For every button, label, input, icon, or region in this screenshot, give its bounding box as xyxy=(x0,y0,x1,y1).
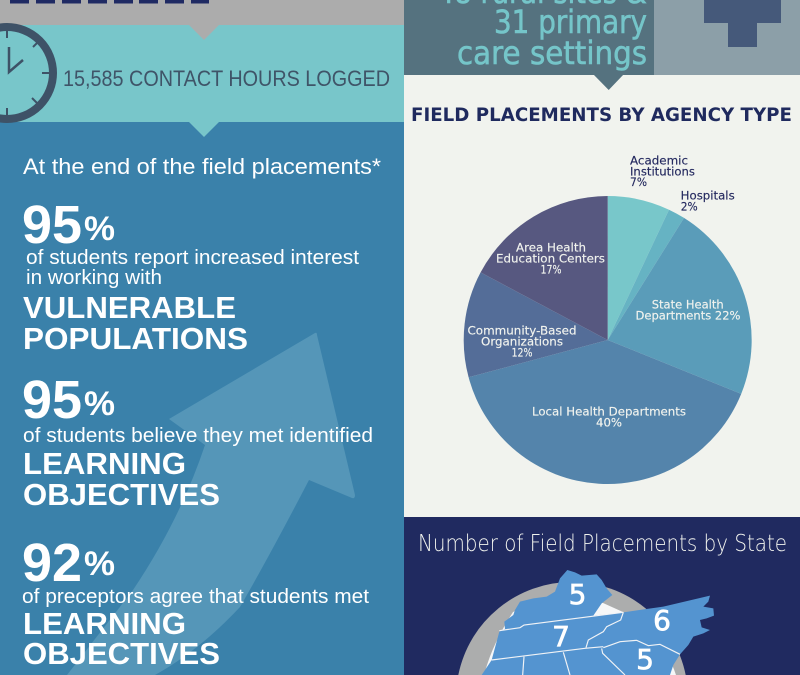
pie labels: 40% xyxy=(596,416,622,430)
icon: upward arrow xyxy=(67,333,355,675)
pie labels: Departments 22% xyxy=(636,308,741,322)
panel: left column background xyxy=(0,0,404,675)
map: state counts: 7 xyxy=(552,620,570,653)
map: state counts: 6 xyxy=(653,604,671,637)
stat block: 95% vulnerable populations: of students report increased interest xyxy=(26,247,359,269)
pie outside labels: 7% xyxy=(630,175,647,189)
stat block: 95% learning objectives: 95 xyxy=(22,370,82,430)
panel: state map background xyxy=(404,517,800,675)
stat block: 92% learning objectives: LEARNING xyxy=(23,606,186,641)
pie outside labels xyxy=(630,153,735,213)
pie labels: Local Health Departments xyxy=(532,405,686,419)
panel: rural sites xyxy=(404,0,800,75)
text: rural sites xyxy=(437,0,647,72)
pointer: rural sites xyxy=(593,74,624,90)
stat block: 95% vulnerable populations: in working with xyxy=(26,267,162,289)
stat block: 95% learning objectives: of students believe they met identified xyxy=(23,425,373,447)
pie labels: 12% xyxy=(512,346,533,360)
stat block: 92% learning objectives xyxy=(22,533,369,671)
stat block: 92% learning objectives: OBJECTIVES xyxy=(23,636,220,671)
text: contact hours: 15,585 CONTACT HOURS LOGGED xyxy=(63,66,390,91)
map: state counts: 5 xyxy=(569,578,586,611)
pointer: gray to teal xyxy=(189,25,219,40)
stat block: 95% vulnerable populations: 95 xyxy=(22,195,82,255)
stat block: 95% learning objectives: OBJECTIVES xyxy=(23,477,220,512)
pie labels xyxy=(468,241,741,430)
map: state counts xyxy=(552,578,671,675)
map: states xyxy=(482,570,714,675)
pie labels: Organizations xyxy=(481,335,563,349)
panel: pie background xyxy=(404,75,800,517)
stat block: 95% vulnerable populations: POPULATIONS xyxy=(23,321,248,356)
icon: medical cross xyxy=(704,0,781,47)
stat block: 95% learning objectives xyxy=(22,370,373,512)
icon row: people figures cropped at top xyxy=(10,0,209,4)
text: rural sites: 31 primary xyxy=(494,3,647,41)
stat block: 95% vulnerable populations: VULNERABLE xyxy=(23,290,236,325)
pie outside labels: 2% xyxy=(681,199,698,213)
stat block: 95% learning objectives: % xyxy=(84,385,115,423)
stat block: 92% learning objectives: 92 xyxy=(22,533,82,593)
pie labels: Education Centers xyxy=(496,252,605,266)
pie labels: Area Health xyxy=(516,241,586,255)
pie outside labels: Academic xyxy=(630,153,688,167)
pie labels: Community-Based xyxy=(468,323,576,337)
heading: field placements: FIELD PLACEMENTS BY AGENCY TYPE xyxy=(411,104,792,126)
icon: clock xyxy=(0,27,53,119)
stat block: 95% vulnerable populations xyxy=(22,195,359,356)
pie outside labels: Institutions xyxy=(630,164,695,178)
stat block: 95% learning objectives: LEARNING xyxy=(23,446,186,481)
stat block: 92% learning objectives: % xyxy=(84,545,115,583)
stat block: 92% learning objectives: of preceptors agree that students met xyxy=(22,586,369,608)
pie labels: 17% xyxy=(540,262,562,276)
pie labels: State Health xyxy=(652,297,724,311)
stat block: 95% vulnerable populations: % xyxy=(84,210,115,248)
pointer: teal to blue xyxy=(189,122,219,137)
pie outside labels: Hospitals xyxy=(681,188,735,202)
pie chart xyxy=(464,153,752,484)
text: intro: At the end of the field placements* xyxy=(23,154,381,179)
text: rural sites: care settings xyxy=(457,34,647,72)
map: ring behind states xyxy=(458,582,686,675)
